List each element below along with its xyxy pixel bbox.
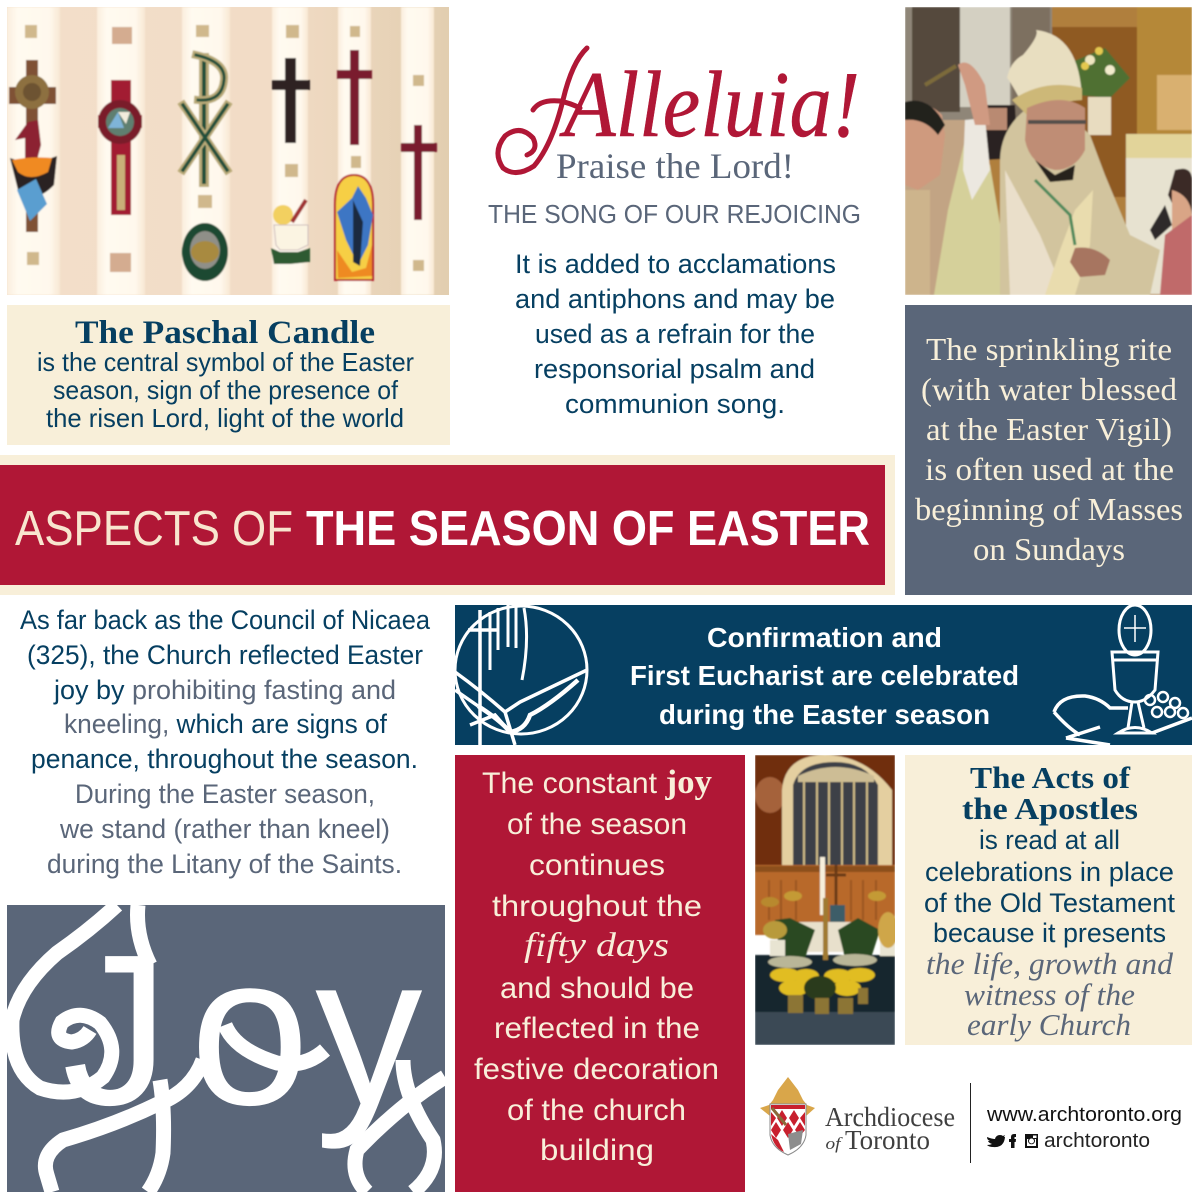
panel: acts of the apostles xyxy=(905,755,1192,1045)
photo: bishop sprinkling xyxy=(905,7,1192,295)
panel: constant joy: continues xyxy=(529,849,665,882)
panel: constant joy: throughout the xyxy=(492,890,702,923)
panel: constant joy: The constant joy xyxy=(482,764,712,801)
panel: acts of the apostles: the Apostles xyxy=(962,791,1138,826)
text: paschal candle description: the risen Lord, light of the world xyxy=(46,403,404,433)
text: paschal candle description xyxy=(37,347,414,433)
panel: sprinkling rite: beginning of Masses xyxy=(915,491,1183,527)
text: council of nicaea: During the Easter season, xyxy=(75,779,375,809)
candle 3 chi rho xyxy=(183,55,227,182)
panel: acts of the apostles: The Acts of xyxy=(970,760,1131,795)
icon: dove and cross xyxy=(455,605,587,745)
title: alleluia lettering xyxy=(498,48,860,173)
banner: aspects of the season of easter: ASPECTS OF xyxy=(15,502,293,556)
panel: constant joy: of the season xyxy=(507,808,687,841)
panel: acts of the apostles: of the Old Testament xyxy=(924,888,1175,918)
photo: church sanctuary xyxy=(755,755,898,1045)
heading: confirmation text: during the Easter season xyxy=(659,699,990,730)
panel: sprinkling rite: The sprinkling rite xyxy=(926,331,1172,367)
text: council of nicaea xyxy=(20,605,430,879)
decorative flourishes xyxy=(12,905,445,1192)
banner: confirmation and first eucharist xyxy=(455,605,1192,745)
text: acclamations: communion song. xyxy=(565,389,785,419)
heading: the paschal candle: The Paschal Candle xyxy=(75,315,375,351)
text: paschal candle description: is the central symbol of the Easter xyxy=(37,347,414,377)
text: paschal candle description: season, sign of the presence of xyxy=(53,375,399,405)
logo: archdiocese of toronto wordmark: Archdiocese xyxy=(825,1102,955,1132)
panel: constant joy: of the church xyxy=(507,1094,686,1127)
text: council of nicaea: (325), the Church reflected Easter xyxy=(27,640,423,670)
panel: constant joy: fifty days xyxy=(524,927,669,964)
heading: the song of our rejoicing: THE SONG OF OUR REJOICING xyxy=(488,199,861,229)
text: social handle: archtoronto xyxy=(1044,1130,1150,1152)
panel: sprinkling rite: is often used at the xyxy=(925,451,1174,487)
panel: the paschal candle xyxy=(7,305,450,445)
text: acclamations: responsorial psalm and xyxy=(534,354,815,384)
panel: constant joy: building xyxy=(540,1134,654,1167)
banner: aspects of the season of easter: THE SEASON OF EASTER xyxy=(306,502,870,556)
panel: constant joy: reflected in the xyxy=(494,1012,700,1045)
text: acclamations: and antiphons and may be xyxy=(515,284,835,314)
candle 6 cross xyxy=(414,125,422,220)
panel: acts of the apostles: is read at all xyxy=(979,825,1120,855)
banner: aspects of the season of easter xyxy=(0,455,895,595)
panel: sprinkling rite: on Sundays xyxy=(973,531,1125,567)
text: acclamations: It is added to acclamations xyxy=(515,249,836,279)
icons: twitter, facebook, instagram xyxy=(987,1134,1038,1148)
text: council of nicaea: during the Litany of the Saints. xyxy=(47,849,402,879)
divider line xyxy=(970,1083,971,1163)
candle 4 cross and lamb xyxy=(285,58,296,143)
heading: confirmation text: First Eucharist are celebrated xyxy=(630,660,1019,691)
subtitle: praise the lord: Praise the Lord! xyxy=(556,146,794,186)
text: website: www.archtoronto.org xyxy=(986,1104,1182,1126)
icon: chalice, bread and grapes xyxy=(1054,605,1192,745)
logo: archdiocese of toronto wordmark: Toronto xyxy=(845,1125,930,1155)
text: council of nicaea: we stand (rather than kneel) xyxy=(59,814,390,844)
panel: acts of the apostles: celebrations in place xyxy=(925,857,1174,887)
text: council of nicaea: penance, throughout the season. xyxy=(31,744,418,774)
panel: acts of the apostles: early Church xyxy=(967,1007,1131,1042)
panel: sprinkling rite xyxy=(905,305,1192,595)
panel: constant joy: and should be xyxy=(500,972,694,1005)
photo: paschal candles xyxy=(7,7,449,295)
logo: archdiocese of toronto wordmark: of xyxy=(826,1134,843,1153)
candle 2 cross xyxy=(111,80,131,215)
text: council of nicaea: As far back as the Council of Nicaea xyxy=(20,605,430,635)
panel: acts of the apostles: the life, growth and xyxy=(926,946,1173,981)
decorative swash xyxy=(498,48,587,173)
panel: sprinkling rite: at the Easter Vigil) xyxy=(926,411,1172,447)
panel: acts of the apostles: witness of the xyxy=(964,977,1135,1012)
heading: confirmation text: Confirmation and xyxy=(707,622,942,653)
panel: acts of the apostles: because it presents xyxy=(933,918,1166,948)
title: alleluia lettering: Alleluia! xyxy=(559,53,860,157)
panel: constant joy xyxy=(455,755,745,1192)
text: council of nicaea: kneeling, which are signs of xyxy=(64,709,388,739)
panel: joy lettering xyxy=(7,905,445,1192)
panel: sprinkling rite: (with water blessed xyxy=(921,371,1177,407)
logo: archdiocese of toronto wordmark xyxy=(825,1102,955,1155)
candle 5 cross and window xyxy=(350,50,359,145)
text: acclamations xyxy=(515,249,836,419)
candle 1 cross xyxy=(26,60,38,232)
text: council of nicaea: joy by prohibiting fasting and xyxy=(53,675,396,705)
heading: confirmation text xyxy=(630,622,1019,730)
text: acclamations: used as a refrain for the xyxy=(535,319,815,349)
alpha and omega marks xyxy=(25,25,424,272)
logo: archdiocese crest xyxy=(760,1077,815,1155)
panel: constant joy: festive decoration xyxy=(474,1053,719,1086)
word: joy: Joy xyxy=(62,909,423,1150)
